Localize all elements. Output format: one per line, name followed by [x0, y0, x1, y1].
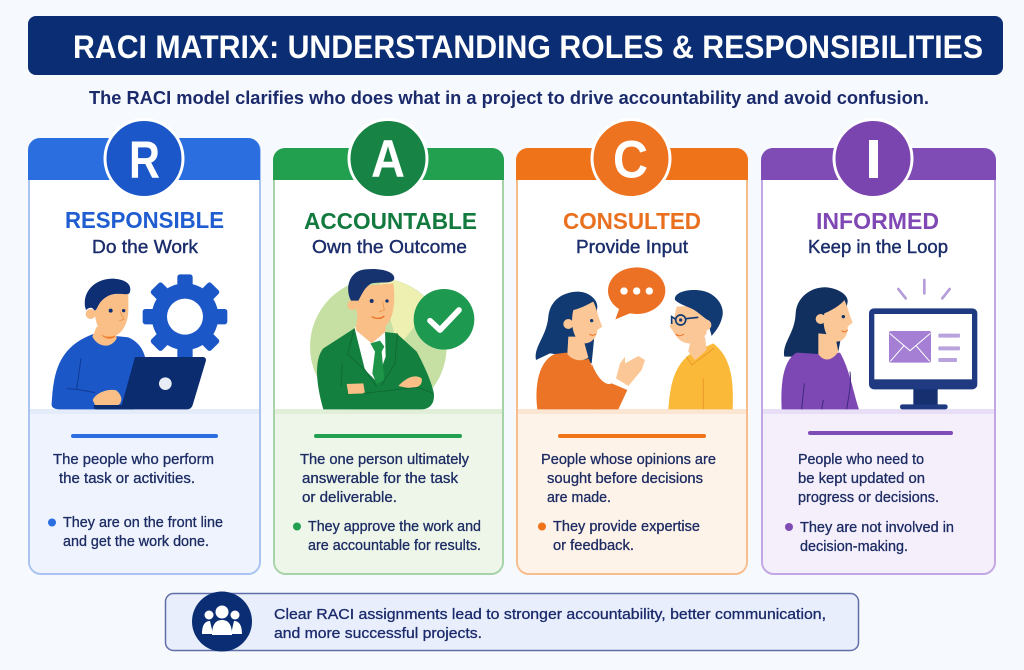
- panel: responsible: [28, 120, 260, 574]
- person: [52, 279, 147, 409]
- woman: [781, 287, 859, 409]
- divider: [808, 431, 953, 435]
- woman: [536, 292, 645, 409]
- illustration: person with laptop and gear: [52, 274, 227, 409]
- panel: informed: [761, 120, 996, 574]
- icon: speech bubble: [608, 267, 665, 319]
- divider: [71, 434, 218, 438]
- illustration: manager with check: [310, 269, 474, 415]
- bullet point: decision-making.: [800, 539, 908, 555]
- callout: [166, 592, 858, 652]
- description: People whose opinions are: [541, 452, 716, 468]
- description: [53, 452, 214, 487]
- subheading: do the work: Do the Work: [92, 237, 199, 257]
- heading: consulted: CONSULTED: [563, 208, 701, 234]
- badge: A: A: [371, 130, 405, 189]
- notification rays: [898, 280, 950, 298]
- divider: [314, 434, 462, 438]
- subheading: provide input: Provide Input: [576, 237, 688, 257]
- subtitle: The RACI model clarifies who does what in a project to drive accountability and avoid confusion.: [89, 87, 929, 108]
- icon: check badge: [414, 289, 474, 350]
- panel: accountable: [273, 120, 504, 574]
- bullet point: [785, 520, 954, 555]
- bullet point: or feedback.: [553, 538, 634, 554]
- callout text: and more successful projects.: [274, 625, 482, 642]
- description: The one person ultimately: [300, 452, 470, 468]
- bullet point: [538, 519, 700, 554]
- icon: team: [192, 592, 252, 652]
- description: sought before decisions: [547, 471, 703, 487]
- title banner: [28, 16, 1003, 75]
- panel: consulted: [516, 120, 748, 574]
- bullet point: They are on the front line: [63, 515, 223, 531]
- man: [668, 290, 733, 409]
- callout text: Clear RACI assignments lead to stronger accountability, better communication,: [274, 606, 826, 623]
- subheading: keep in the loop: Keep in the Loop: [808, 237, 948, 257]
- description: The people who perform: [53, 452, 214, 468]
- illustration: person with monitor: [781, 280, 977, 409]
- illustration: two people talking: [536, 267, 733, 409]
- divider: [558, 434, 706, 438]
- heading: responsible: RESPONSIBLE: [65, 207, 224, 233]
- bullet point: They are not involved in: [800, 520, 954, 536]
- description: or deliverable.: [302, 490, 397, 506]
- badge: A: [349, 120, 427, 198]
- description: [798, 452, 939, 506]
- badge: C: C: [613, 130, 648, 190]
- icon: laptop: [94, 357, 206, 409]
- heading: accountable: ACCOUNTABLE: [304, 208, 477, 234]
- description: are made.: [547, 490, 611, 506]
- description: the task or activities.: [59, 471, 195, 487]
- badge: R: [105, 120, 183, 198]
- bullet point: They provide expertise: [553, 519, 700, 535]
- callout text: [274, 606, 826, 642]
- subheading: own the outcome: Own the Outcome: [312, 237, 467, 257]
- background circle: [310, 278, 447, 415]
- bullet point: are accountable for results.: [308, 538, 481, 554]
- bullet point: [48, 515, 223, 550]
- title: RACI MATRIX: UNDERSTANDING ROLES & RESPONSIBILITIES: [73, 29, 983, 65]
- bullet point: They approve the work and: [308, 519, 481, 535]
- description: be kept updated on: [798, 471, 925, 487]
- description: People who need to: [798, 452, 924, 468]
- person: [317, 269, 434, 409]
- heading: informed: INFORMED: [816, 208, 939, 234]
- description: answerable for the task: [302, 471, 459, 487]
- badge: R: R: [129, 131, 160, 190]
- icon: monitor with email: [869, 308, 977, 409]
- description: [300, 452, 470, 506]
- description: [541, 452, 716, 506]
- description: progress or decisions.: [798, 490, 939, 506]
- bullet point: and get the work done.: [63, 534, 209, 550]
- icon: gear: [143, 274, 227, 363]
- badge: C: [592, 120, 670, 198]
- badge: I: [834, 120, 912, 198]
- bullet point: [293, 519, 481, 554]
